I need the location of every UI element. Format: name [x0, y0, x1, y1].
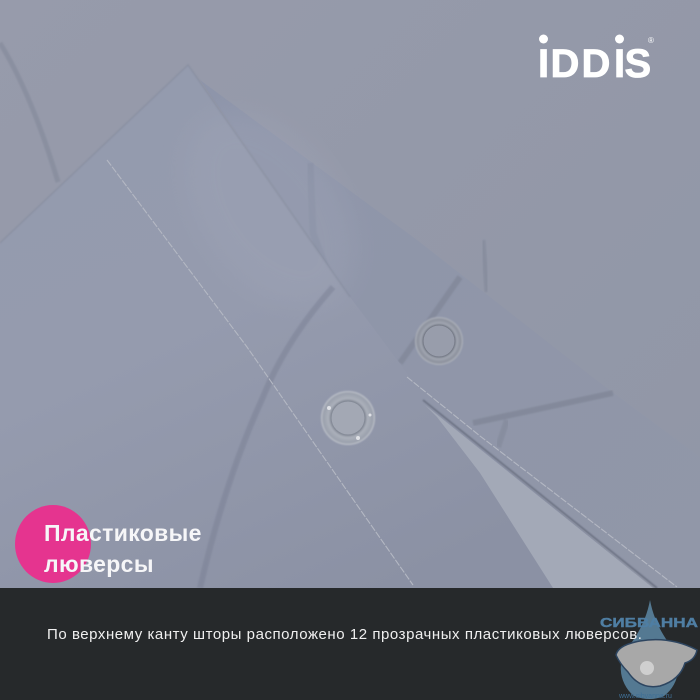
heading: Пластиковые — [44, 520, 202, 546]
watermark: Сибванна bath mascot: СИБВАННА — [600, 615, 699, 630]
logo: IDDIS: IDDIS — [538, 42, 651, 86]
light inner fabric panel — [425, 405, 653, 588]
heading — [44, 520, 202, 577]
hem seam shadow — [423, 400, 657, 588]
eyelet lower — [321, 391, 375, 445]
heading: люверсы — [44, 551, 154, 577]
hem back layer — [200, 80, 700, 588]
curtain top flap — [0, 65, 653, 588]
pink circle — [15, 505, 91, 583]
watermark: Сибванна bath mascot: www.sibvanna.ru — [618, 693, 672, 700]
eyelet upper — [415, 317, 463, 365]
body text: По верхнему канту шторы расположено 12 прозрачных пластиковых люверсов. — [47, 626, 642, 643]
bottom bar — [0, 588, 700, 700]
fold edge — [0, 65, 350, 297]
logo: IDDIS: ® — [648, 36, 654, 45]
stitching — [107, 160, 677, 587]
